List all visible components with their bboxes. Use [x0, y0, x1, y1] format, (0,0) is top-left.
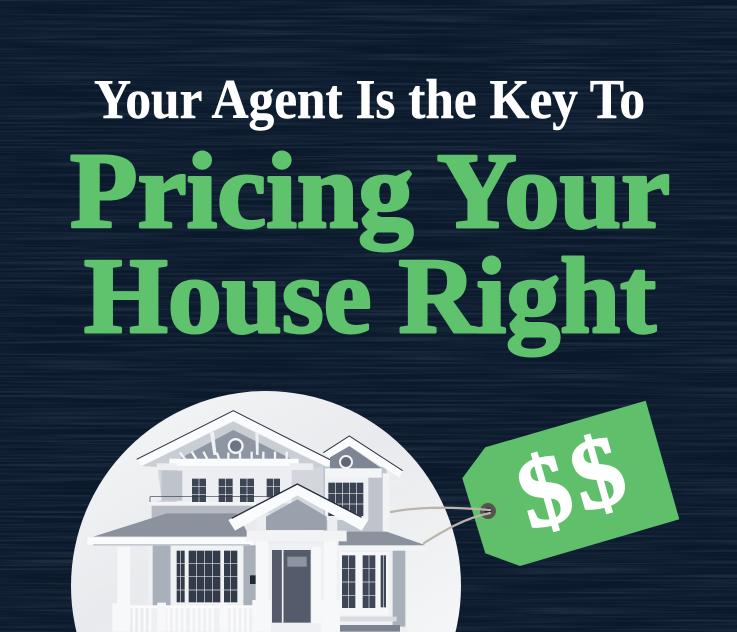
- tag dollar signs: $: [505, 431, 584, 551]
- upper windows: [192, 479, 280, 502]
- title: main heading: House Right: [84, 237, 656, 356]
- french doors: [339, 552, 389, 615]
- left window: [171, 546, 243, 604]
- right wing: [323, 467, 387, 533]
- left roof: [93, 513, 250, 537]
- photo circle with house: [71, 391, 461, 632]
- columns: [112, 541, 340, 632]
- porch gable: [266, 499, 327, 530]
- pergola beam: [180, 452, 287, 459]
- title: intro line: Your Agent Is the Key To: [94, 69, 645, 131]
- title: main heading: [70, 132, 670, 356]
- porch railing: [130, 605, 253, 608]
- price tag: [391, 401, 679, 566]
- house illustration: [87, 411, 427, 632]
- lower porch wall: [148, 543, 407, 632]
- tag dollar signs: $: [558, 413, 637, 533]
- front door: [272, 550, 311, 623]
- tag eyelet: [480, 503, 496, 519]
- main gable: [180, 422, 299, 463]
- balcony rail: [150, 497, 267, 502]
- tag dollar signs: [505, 413, 637, 551]
- tag body: [462, 401, 679, 566]
- title: main heading: Pricing Your: [70, 132, 670, 251]
- tag string: [391, 508, 490, 543]
- right roof: [338, 532, 426, 546]
- upper storey wall: [152, 460, 327, 513]
- steps: [340, 617, 397, 621]
